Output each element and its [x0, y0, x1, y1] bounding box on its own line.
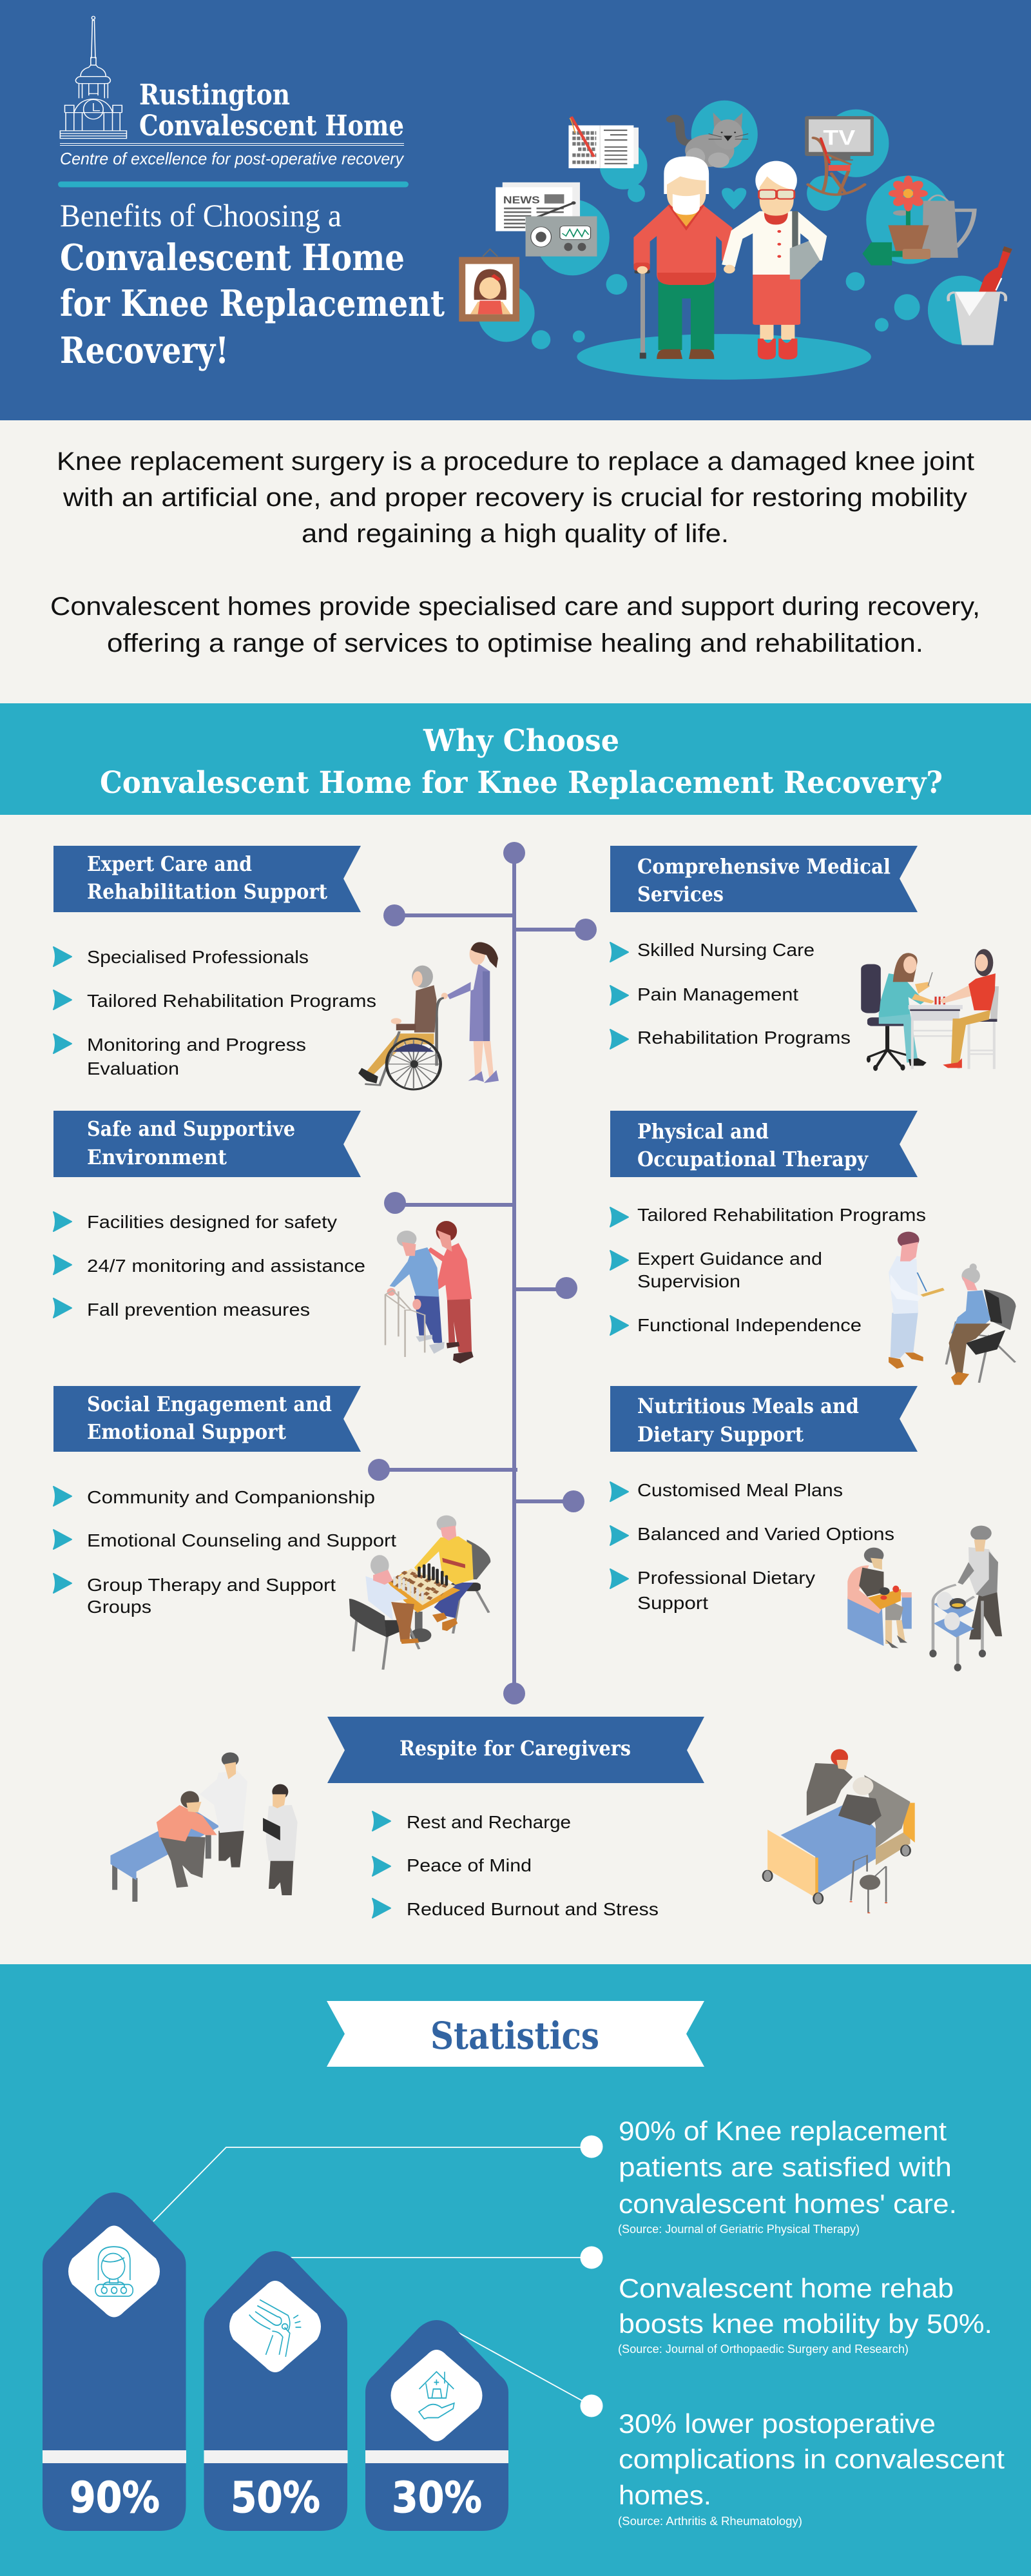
icon: flower pot, watering can and trowel: [862, 175, 974, 266]
heading: why choose band: [0, 703, 1031, 815]
panel: respite for caregivers: [110, 1717, 915, 1919]
bullet list: Community and Companionship: [87, 1487, 375, 1507]
icon: television: [805, 116, 874, 161]
ribbon heading: [53, 846, 361, 912]
icon: newspaper: [496, 182, 580, 231]
title: Convalescent Home: [60, 237, 405, 279]
stat text: mobility: [580, 2246, 992, 2356]
panel: introduction: offering a range of services to optimise healing and rehabilitation.: [107, 629, 923, 658]
bullet list: Groups: [87, 1597, 151, 1617]
ribbon heading: Occupational Therapy: [637, 1147, 869, 1171]
stat text: mobility: boosts knee mobility by 50%.: [619, 2308, 992, 2339]
panel: safe and supportive environment: [53, 1111, 474, 1363]
bullet list: Professional Dietary: [637, 1568, 815, 1588]
ribbon heading: Respite for Caregivers: [400, 1736, 631, 1761]
illustration: nurse pushing wheelchair: [358, 942, 499, 1089]
logo: wordmark: [139, 79, 404, 142]
ribbon heading: Services: [637, 882, 724, 906]
ribbon heading: [327, 1717, 704, 1783]
stat bar: 30 percent: [365, 2320, 508, 2531]
stat bar: 50 percent: [204, 2251, 348, 2531]
bullet list: Skilled Nursing Care: [637, 940, 814, 960]
connector lines: [153, 2147, 592, 2406]
ribbon heading: Nutritious Meals and: [637, 1394, 859, 1418]
timeline connector: [368, 842, 597, 1704]
bullet list: [53, 947, 376, 1078]
stat text: satisfaction: (Source: Journal of Geriatric Physical Therapy): [618, 2223, 860, 2236]
bullet list: Reduced Burnout and Stress: [407, 1899, 659, 1919]
bullet list: [372, 1811, 659, 1919]
bullet list: Facilities designed for safety: [87, 1212, 337, 1232]
bullet list: 24/7 monitoring and assistance: [87, 1256, 365, 1276]
stat text: satisfaction: convalescent homes' care.: [619, 2189, 957, 2219]
stat text: satisfaction: 90% of Knee replacement: [619, 2116, 947, 2146]
value: 90%: [70, 2473, 160, 2522]
panel: social engagement: [53, 1386, 490, 1670]
bullet list: [610, 1480, 894, 1613]
bullet list: Functional Independence: [637, 1315, 862, 1335]
illustration: caregiver beside hospital bed: [763, 1749, 915, 1913]
illustration: two men playing chess: [349, 1516, 490, 1670]
bullet list: Balanced and Varied Options: [637, 1524, 894, 1544]
panel: introduction: with an artificial one, and proper recovery is crucial for restoring mobility: [63, 483, 967, 512]
bullet list: Customised Meal Plans: [637, 1480, 843, 1500]
bullet list: Tailored Rehabilitation Programs: [87, 991, 376, 1011]
bullet list: Supervision: [637, 1271, 740, 1291]
stat bar: 90 percent: [43, 2192, 186, 2531]
icon: newspaper: NEWS: [503, 195, 540, 206]
ribbon heading: Physical and: [637, 1119, 769, 1144]
stat text: complications: (Source: Arthritis & Rheumatology): [618, 2515, 802, 2528]
value: 50%: [231, 2473, 320, 2522]
bullet list: [610, 940, 851, 1049]
bullet list: Evaluation: [87, 1059, 179, 1078]
logo: wordmark: Convalescent Home: [139, 110, 404, 142]
icon: ice bucket and wine: [949, 246, 1012, 345]
ribbon heading: [53, 1386, 361, 1452]
ribbon heading: Rehabilitation Support: [87, 879, 327, 904]
stat text: complications: 30% lower postoperative: [619, 2408, 936, 2439]
logo: wordmark: Rustington: [139, 79, 290, 112]
stat text: complications: homes.: [619, 2480, 711, 2510]
bullet list: Rehabilitation Programs: [637, 1028, 851, 1048]
bullet list: [53, 1212, 365, 1320]
heading ribbon: statistics: Statistics: [430, 2014, 599, 2058]
bullet list: Rest and Recharge: [407, 1812, 571, 1832]
panel: introduction: and regaining a high quality of life.: [302, 520, 729, 548]
figure: elderly woman: [722, 161, 827, 360]
ribbon heading: Comprehensive Medical: [637, 854, 891, 879]
panel: comprehensive medical services: [610, 846, 999, 1071]
figure: elderly man: [633, 156, 733, 359]
stat text: satisfaction: [580, 2116, 957, 2236]
ribbon heading: Dietary Support: [637, 1422, 804, 1447]
ribbon heading: Emotional Support: [87, 1420, 286, 1444]
icon: television: TV: [823, 126, 855, 150]
illustration: woman served a meal from a trolley: [847, 1526, 1002, 1672]
stat text: satisfaction: patients are satisfied with: [619, 2152, 952, 2182]
illustration: therapist with seated patient: [889, 1232, 1016, 1385]
heading: why choose band: Convalescent Home for Knee Replacement Recovery?: [100, 765, 943, 801]
bullet list: Fall prevention measures: [87, 1300, 310, 1320]
ribbon heading: [610, 1386, 918, 1452]
stat text: complications: [580, 2394, 1005, 2528]
icon: knee joint: [229, 2281, 321, 2372]
icon: crossword and pen: [568, 117, 639, 168]
stat text: mobility: Convalescent home rehab: [619, 2273, 954, 2303]
tagline: Centre of excellence for post-operative recovery: [60, 149, 405, 168]
panel: physical and occupational therapy: [610, 1111, 1016, 1385]
heading ribbon: statistics: [327, 2001, 704, 2067]
bullet list: Specialised Professionals: [87, 947, 309, 967]
bullet list: Peace of Mind: [407, 1855, 532, 1875]
bullet list: Tailored Rehabilitation Programs: [637, 1205, 926, 1225]
panel: introduction: [0, 420, 1031, 703]
panel: nutritious meals: [610, 1386, 1002, 1672]
ribbon heading: [53, 1111, 361, 1177]
bullet list: Emotional Counseling and Support: [87, 1530, 396, 1550]
stat text: complications: complications in convalescent: [619, 2444, 1005, 2474]
bullet list: Pain Management: [637, 984, 798, 1004]
icon: cat: [671, 113, 748, 168]
bullet list: [610, 1205, 926, 1335]
ribbon heading: [610, 846, 918, 912]
panel: statistics: [0, 1964, 1031, 2576]
icon: satisfied patient rating: [68, 2225, 160, 2317]
heading: why choose band: Why Choose: [423, 723, 619, 759]
panel: expert care: [53, 846, 499, 1089]
value: 30%: [392, 2473, 482, 2522]
logo: clock tower: [60, 16, 126, 139]
ribbon heading: Environment: [87, 1145, 227, 1169]
bullet list: [53, 1487, 396, 1617]
icon: radio: [526, 201, 597, 257]
ribbon heading: Social Engagement and: [87, 1392, 332, 1416]
bullet list: Expert Guidance and: [637, 1249, 822, 1269]
illustration: nurse and patient at table: [861, 949, 999, 1071]
panel: introduction: Convalescent homes provide specialised care and support during recovery,: [50, 592, 980, 621]
illustration: carer helping man with walker: [385, 1221, 474, 1363]
stat text: mobility: (Source: Journal of Orthopaedic Surgery and Research): [618, 2343, 909, 2356]
bullet list: Group Therapy and Support: [87, 1575, 336, 1595]
bullet list: Support: [637, 1593, 708, 1613]
ribbon heading: Expert Care and: [87, 852, 252, 876]
title: for Knee Replacement: [60, 282, 445, 325]
panel: header: [0, 0, 1031, 420]
bullet list: Monitoring and Progress: [87, 1035, 306, 1055]
icon: portrait: [459, 249, 519, 322]
panel: introduction: Knee replacement surgery is a procedure to replace a damaged knee joint: [57, 447, 974, 476]
icon: rocking chair: [808, 138, 865, 195]
ribbon heading: [610, 1111, 918, 1177]
illustration: doctors examining patient: [110, 1752, 298, 1902]
title: [60, 197, 445, 372]
title: Recovery!: [60, 329, 229, 372]
illustration: elderly couple and hobbies: [459, 101, 1012, 380]
title: Benefits of Choosing a: [60, 197, 342, 233]
ribbon heading: Safe and Supportive: [87, 1117, 295, 1141]
icon: home care in hand: [390, 2350, 482, 2441]
